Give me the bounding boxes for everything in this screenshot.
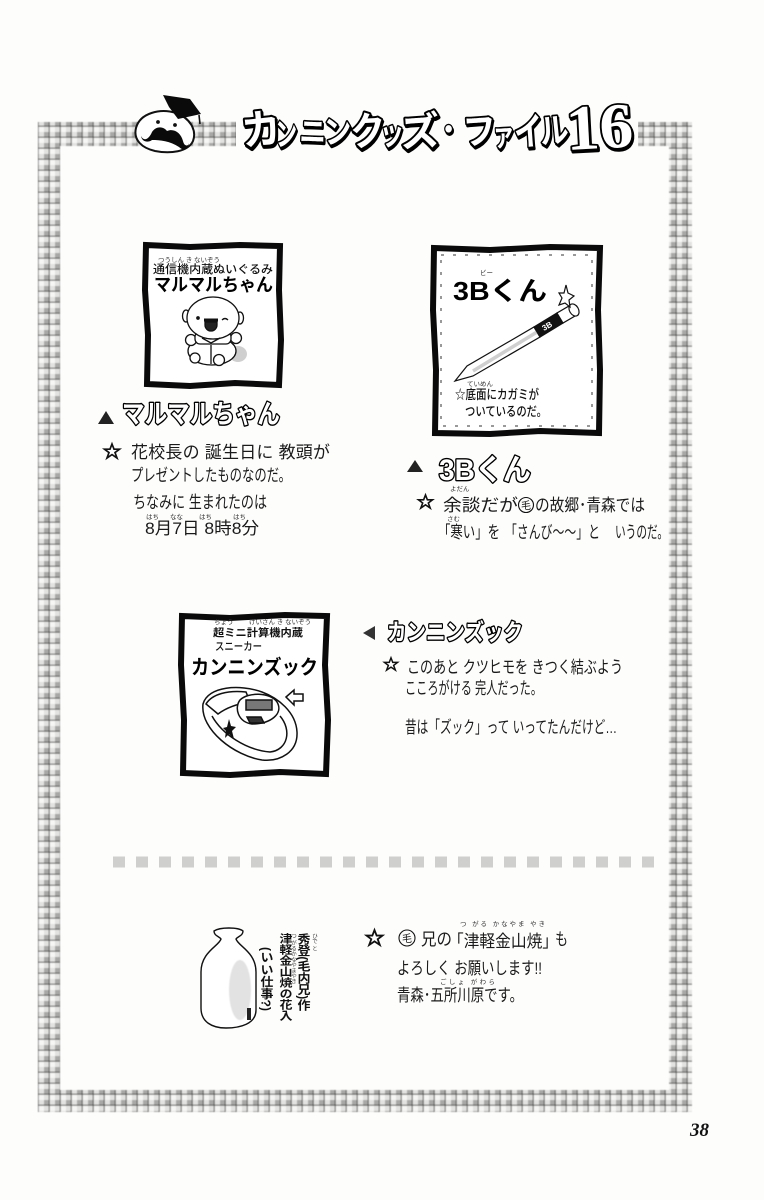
vertical caption: bottle: (いい仕事?) xyxy=(258,947,274,1011)
text block: マルマルちゃん note: ちなみに 生まれたのは xyxy=(133,493,267,512)
panel: マルマルちゃん box xyxy=(145,245,281,386)
dotted divider xyxy=(113,856,655,868)
icon: sneaker with calculator and arrow xyxy=(203,688,303,760)
title: カンニングッズ・ファイル16: ン xyxy=(274,115,299,153)
vertical caption: bottle: つ がるかなやまやき xyxy=(290,933,297,984)
text block: 津軽金山焼 note: 兄の xyxy=(421,930,452,949)
page number: 38 xyxy=(689,1120,710,1141)
icon: pencil with star: 3B xyxy=(540,320,554,333)
text block: カンニンズック note: このあと クツヒモを きつく結ぶよう xyxy=(407,658,623,677)
title: カンニングッズ・ファイル16: カ xyxy=(239,104,283,155)
icon: sake bottle vase xyxy=(201,928,256,1028)
text block: マルマルちゃん note: 8月7日 8時8分 xyxy=(145,519,259,538)
panel name: マルマルちゃん xyxy=(154,275,273,295)
text block: マルマルちゃん note: プレゼントしたものなのだ。 xyxy=(131,466,291,485)
text block: 3Bくん note: 「さんび〜〜」と xyxy=(505,523,600,542)
heading: マルマルちゃん: マルマルちゃん xyxy=(122,399,280,429)
mascot: mustached face with graduation cap xyxy=(135,95,201,152)
title: カンニングッズ・ファイル16: ァ xyxy=(492,117,516,153)
vertical caption: bottle: ひで と xyxy=(311,933,318,951)
title: カンニングッズ・ファイル16: ズ xyxy=(399,109,441,156)
panel: カンニンズック box: けいさん き ないぞう xyxy=(249,618,311,626)
text block: マルマルちゃん note: なな xyxy=(170,513,184,521)
vertical caption: bottle: 秀登(毛内兄)作 xyxy=(296,932,310,1012)
text block: 津軽金山焼 note: 青森･五所川原です。 xyxy=(397,986,523,1005)
title banner mask xyxy=(236,98,638,154)
text block: 津軽金山焼 note: 毛 xyxy=(402,933,412,945)
text block: 3Bくん note: よだん xyxy=(450,485,470,493)
text block: カンニンズック note: 昔は「ズック」って いってたんだけど… xyxy=(405,718,617,737)
panel: 3Bくん box: ていめん xyxy=(467,380,494,388)
text block: 津軽金山焼 note: よろしく お願いします!! xyxy=(397,959,542,978)
checkered page border xyxy=(38,122,692,1112)
title: カンニングッズ・ファイル16: ク xyxy=(349,108,387,154)
text block: マルマルちゃん note: はち xyxy=(233,513,246,521)
text block: 津軽金山焼 note: つ がる かなやま やき xyxy=(460,919,545,928)
title: カンニングッズ・ファイル16: ッ xyxy=(379,116,405,153)
panel: カンニンズック box xyxy=(181,615,328,775)
title: カンニングッズ・ファイル16: ニ xyxy=(299,116,327,150)
text block: マルマルちゃん note: 花校長の 誕生日に 教頭が xyxy=(131,443,330,462)
text block: 3Bくん note xyxy=(418,485,668,542)
text block: 3Bくん note: さむ xyxy=(447,515,460,523)
heading: 3Bくん: 3Bくん xyxy=(439,454,531,487)
panel: カンニンズック box: スニーカー xyxy=(215,640,262,653)
text block: 津軽金山焼 note: も xyxy=(555,930,568,949)
title: カンニングッズ・ファイル16: イ xyxy=(513,111,544,155)
panel: マルマルちゃん box: つうしん き ないぞう xyxy=(158,256,220,264)
text block: 3Bくん note: の故郷･青森では xyxy=(535,496,645,515)
panel: 3Bくん box: ついているのだ。 xyxy=(465,404,547,419)
panel caption: 超ミニ計算機内蔵 xyxy=(213,626,304,639)
panel caption: 通信機内蔵ぬいぐるみ xyxy=(153,262,273,276)
panel name: カンニンズック xyxy=(191,655,318,679)
text block: 津軽金山焼 note: ごしょ がわら xyxy=(440,977,495,986)
title: カンニングッズ・ファイル16: 16 xyxy=(564,91,635,165)
vertical caption: bottle xyxy=(258,932,318,1022)
text block: カンニンズック note xyxy=(384,658,623,737)
text block: マルマルちゃん note xyxy=(104,443,330,538)
text block: マルマルちゃん note: はち xyxy=(146,513,159,521)
panel: 3Bくん box: ビー xyxy=(480,268,493,277)
text block: 3Bくん note: 余談だが xyxy=(443,496,518,515)
panel caption: ☆底面にカガミが xyxy=(455,387,539,402)
icon: doll xyxy=(182,297,247,366)
text block: 津軽金山焼 note: 「津軽金山焼」 xyxy=(448,932,558,951)
text block: マルマルちゃん note: はち xyxy=(199,513,212,521)
title: カンニングッズ・ファイル16: ル xyxy=(538,110,570,152)
icon: pencil with star xyxy=(455,285,581,381)
text block: 3Bくん note: 「寒い」を xyxy=(438,523,500,542)
text block: カンニンズック note: こころがける 完人だった。 xyxy=(405,679,542,698)
panel name: 3Bくん xyxy=(453,276,547,306)
text block: 津軽金山焼 note xyxy=(367,919,568,1005)
title: カンニングッズ・ファイル16: ン xyxy=(322,113,354,151)
text block: 3Bくん note: 毛 xyxy=(521,500,531,512)
title: カンニングッズ・ファイル16: フ xyxy=(462,112,498,153)
title: カンニングッズ・ファイル16: ・ xyxy=(436,114,461,146)
panel: カンニンズック box: ちょう xyxy=(214,618,234,626)
title: カンニングッズ・ファイル16 xyxy=(239,91,635,165)
heading: カンニンズック: カンニンズック xyxy=(387,619,523,645)
text block: 3Bくん note: いうのだ。 xyxy=(615,523,668,542)
panel: 3Bくん box xyxy=(433,247,600,434)
vertical caption: bottle: 津軽金山焼の花入 xyxy=(278,933,292,1022)
